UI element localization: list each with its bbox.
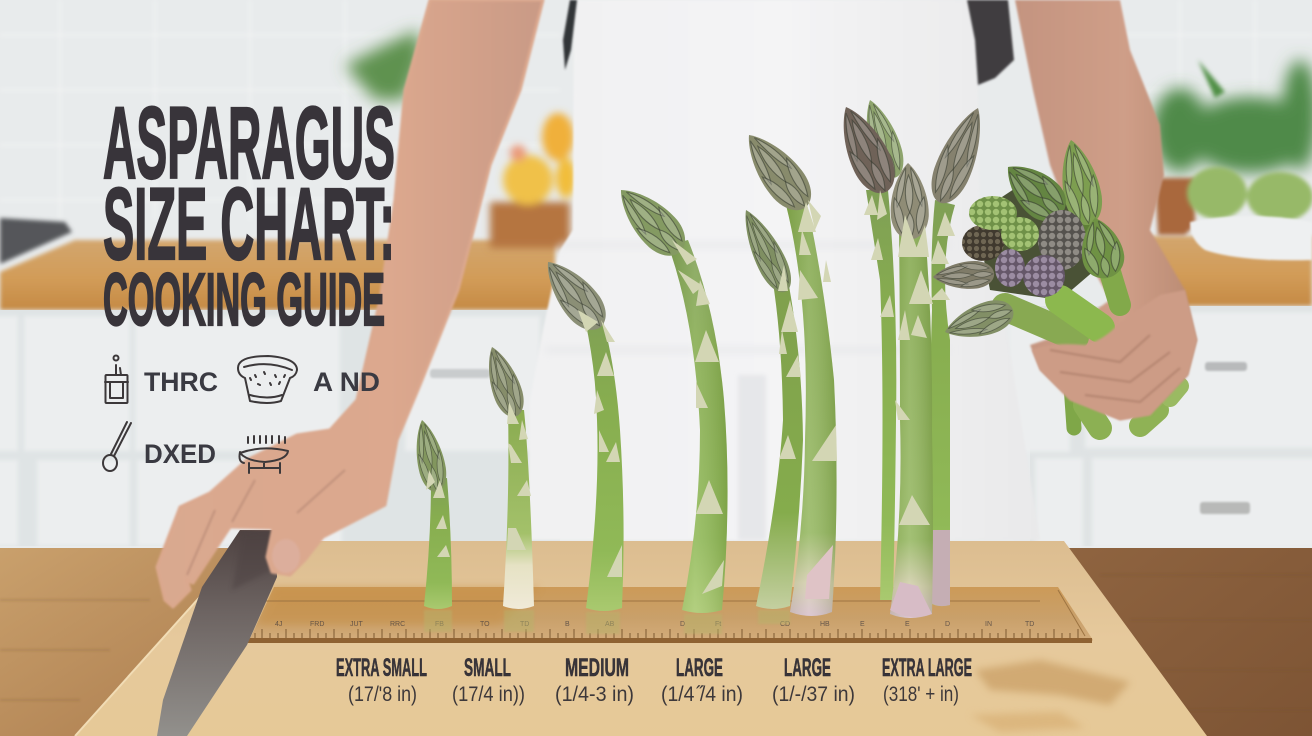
icon: grill (240, 436, 288, 473)
asparagus spears (409, 95, 995, 618)
ruler numbers: 4J (275, 621, 282, 628)
text: ASPARAGUS (103, 86, 395, 200)
icon: bread loaf (238, 356, 297, 403)
apron (528, 0, 1040, 540)
label: large: (1/4 ̋/4 in) (661, 683, 743, 706)
ruler numbers: D (945, 621, 950, 628)
board stain (975, 660, 1130, 705)
icons and labels (103, 356, 380, 473)
tip: right green (1075, 214, 1128, 282)
ruler numbers: CD (780, 621, 790, 628)
label: extra small (336, 654, 427, 706)
table right (1062, 548, 1312, 736)
label: DXED: DXED (144, 439, 216, 469)
apron strap right (967, 0, 1014, 85)
ruler numbers: FRD (310, 621, 324, 628)
ruler ticks (255, 629, 1078, 638)
ruler (248, 587, 1093, 643)
label: large second: LARGE (784, 654, 831, 682)
left counter (0, 240, 555, 310)
bundle stems (1005, 190, 1120, 337)
wall (0, 0, 1312, 320)
label: extra large: EXTRA LARGE (882, 654, 972, 682)
ruler numbers: AB (605, 621, 615, 628)
ruler numbers: TO (480, 621, 490, 628)
label: small: (17/4 in)) (452, 683, 525, 706)
right hand fingers (1032, 290, 1197, 420)
tip: dark brown (962, 225, 1004, 261)
left forearm and hand (157, 0, 543, 607)
ruler numbers: JUT (350, 621, 364, 628)
label: small (452, 654, 525, 706)
label: extra small: EXTRA SMALL (336, 654, 427, 682)
bundle backing shadow (975, 185, 1095, 300)
ruler numbers: TD (520, 621, 529, 628)
white bowl (1190, 216, 1312, 260)
spear: extra large, left (828, 95, 910, 600)
ruler numbers: E (905, 621, 910, 628)
icon: jar (105, 356, 128, 403)
ruler numbers: Ft (715, 621, 721, 628)
ruler numbers: FB (435, 621, 444, 628)
label: THRC: THRC (144, 367, 218, 397)
tip: purple (995, 249, 1025, 287)
label: large second (772, 654, 855, 706)
spear reflections (424, 610, 790, 634)
tabletop (0, 541, 1312, 736)
text: SIZE CHART: (103, 167, 395, 281)
text: COOKING GUIDE (103, 258, 385, 341)
icon: spoon (103, 422, 131, 471)
left plant (345, 30, 422, 100)
cabinets (0, 306, 1312, 548)
tip: round green (969, 196, 1017, 230)
ruler numbers: D (680, 621, 685, 628)
ruler numbers: HB (820, 621, 830, 628)
kitchen background (0, 0, 1312, 548)
label: medium: MEDIUM (565, 654, 629, 682)
spear: large one (607, 176, 728, 613)
right plant (1152, 60, 1312, 173)
label: large: LARGE (676, 654, 723, 682)
bundle stems below hand (1071, 385, 1180, 428)
label: medium (555, 654, 634, 706)
knife (157, 530, 277, 736)
size labels (336, 654, 972, 706)
label: large second: (1/-/37 in) (772, 683, 855, 706)
fruit bowl (490, 113, 576, 248)
ruler numbers (275, 621, 1034, 628)
table left (0, 548, 300, 736)
label: extra large: (318' + in) (883, 683, 959, 706)
label: A ND: A ND (313, 367, 380, 397)
label: extra small: (17/'8 in) (348, 683, 417, 706)
spear: extra large, right (923, 101, 995, 606)
finger shading (187, 470, 345, 575)
ruler numbers: B (565, 621, 570, 628)
ruler numbers: IN (985, 621, 992, 628)
spear: extra small (409, 417, 452, 609)
label: medium: (1/4-3 in) (555, 683, 634, 706)
label: large (661, 654, 743, 706)
tip: tall top (1053, 136, 1107, 229)
apron folds (545, 245, 950, 350)
title (103, 86, 395, 341)
finger creases (1050, 335, 1180, 402)
spear: large two (behind) (733, 204, 803, 609)
tip: grey (1038, 210, 1086, 270)
right counter (1150, 236, 1312, 306)
bundle of asparagus tips (932, 136, 1128, 347)
tip: lower (940, 294, 1018, 347)
pot (1155, 178, 1195, 235)
ruler numbers: RRC (390, 621, 405, 628)
ruler numbers: TD (1025, 621, 1034, 628)
tip: left upper (994, 151, 1075, 230)
tip: grey left (932, 260, 995, 291)
label: extra large (882, 654, 972, 706)
stove (0, 218, 72, 264)
limes (1187, 167, 1312, 222)
right forearm and hand (1015, 0, 1197, 420)
spear: medium (534, 250, 624, 611)
apron strap left (563, 0, 577, 70)
spear: large three (tall) (733, 123, 837, 616)
ruler numbers: E (860, 621, 865, 628)
wall tiles (0, 0, 1312, 220)
spear: extra large, centre (889, 162, 933, 618)
cutting board (75, 541, 1207, 736)
spear: small (478, 342, 534, 609)
label: small: SMALL (464, 654, 511, 682)
